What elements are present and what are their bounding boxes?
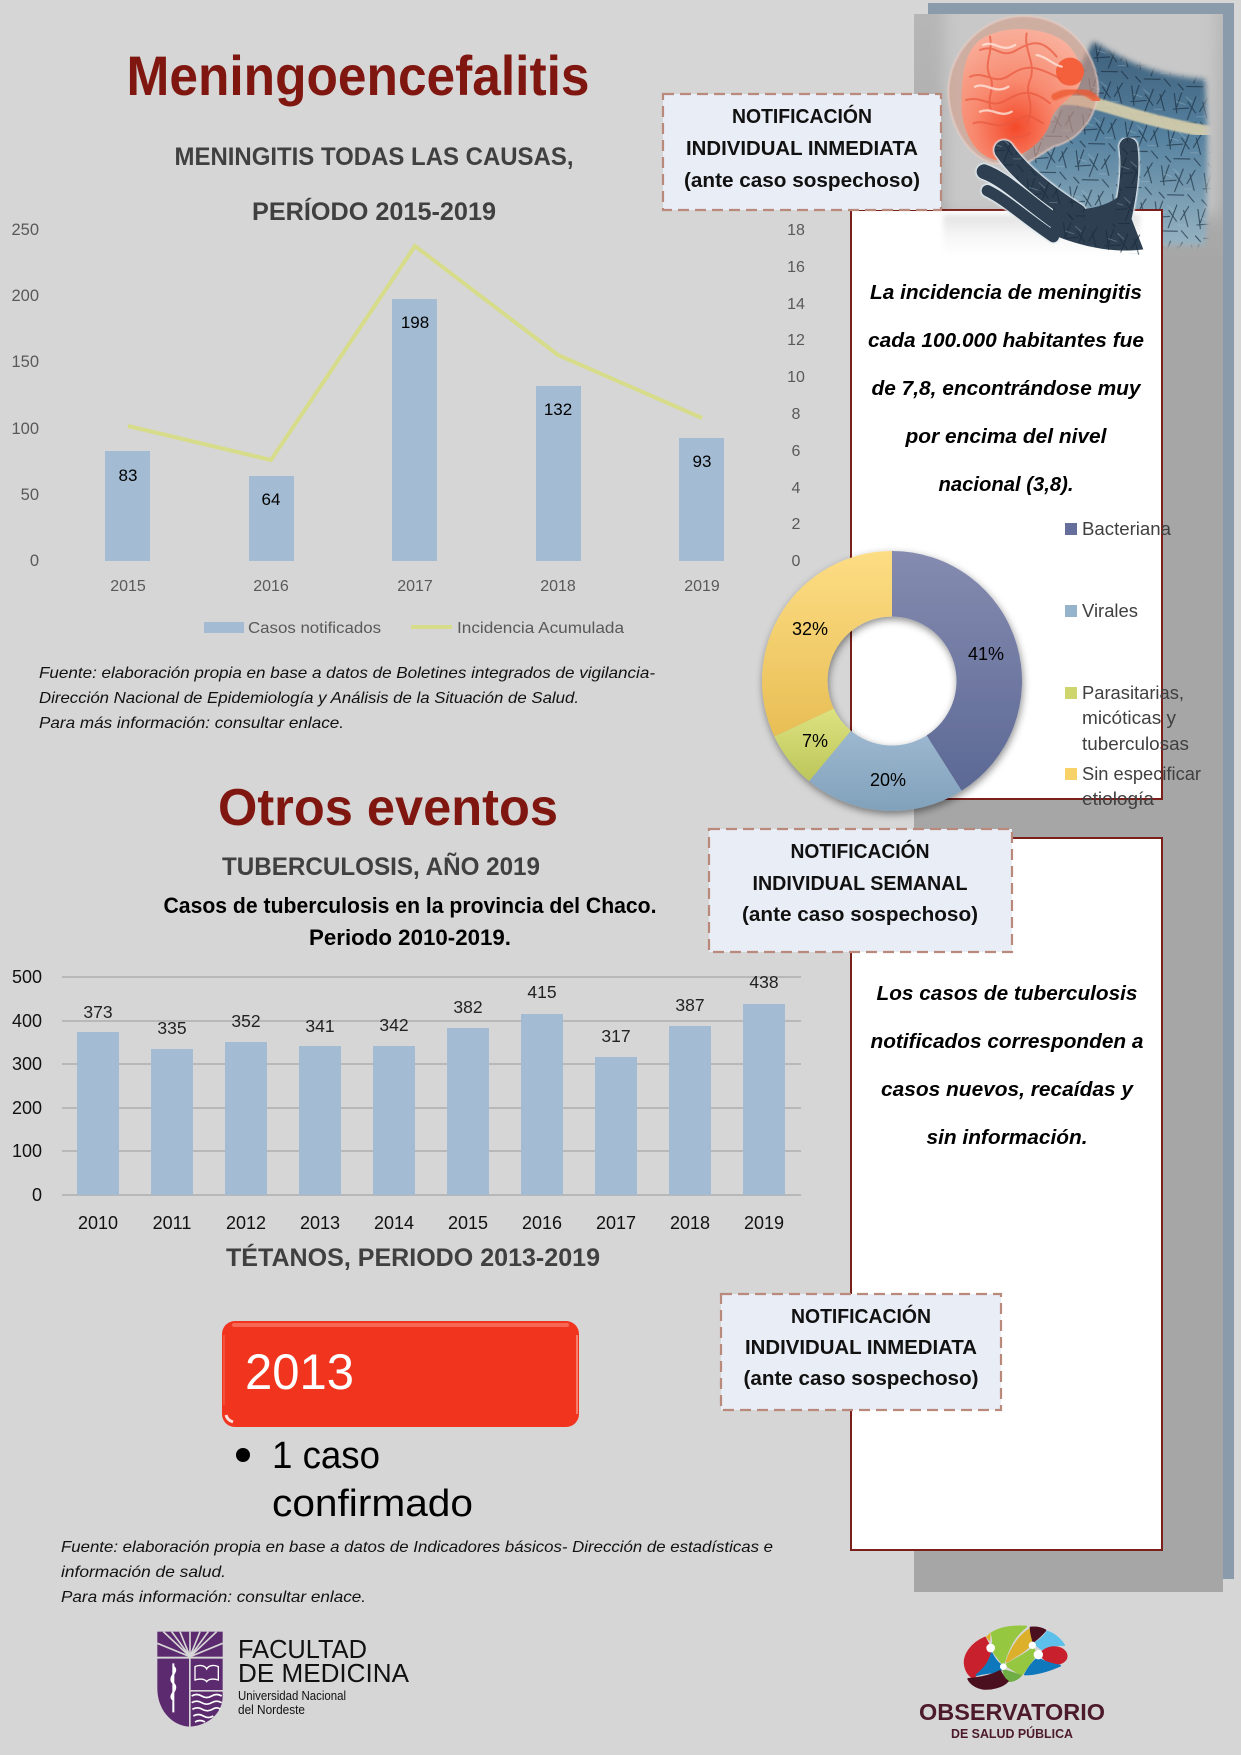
incidence statement: de 7,8, encontrándose muy xyxy=(872,378,1141,400)
incidence statement: nacional (3,8). xyxy=(938,474,1074,496)
bar value labels: 342 xyxy=(379,1015,409,1035)
year labels: 2017 xyxy=(397,578,433,595)
axis labels: 0 xyxy=(32,1185,42,1205)
subtitle: tuberculosis 2019: TUBERCULOSIS, AÑO 2019 xyxy=(222,851,540,881)
callout: immediate notification tetanus xyxy=(721,1294,1001,1410)
observatory name xyxy=(919,1699,1105,1741)
callout: immediate individual notification: NOTIFICACIÓN xyxy=(732,104,872,128)
right axis labels xyxy=(787,222,805,570)
observatory name: OBSERVATORIO xyxy=(919,1699,1105,1725)
chart legend xyxy=(204,620,624,637)
slice: virales xyxy=(809,731,962,811)
tuberculosis statement: notificados corresponden a xyxy=(870,1031,1144,1053)
callout: immediate notification tetanus: NOTIFICACIÓN xyxy=(791,1304,931,1328)
combo chart: meningitis cases and cumulative incidence xyxy=(11,221,805,637)
right axis labels: 0 xyxy=(792,553,801,570)
chart title: tuberculosis cases: Periodo 2010-2019. xyxy=(309,925,511,950)
donut legend: etiología xyxy=(1082,789,1155,809)
donut legend: Sin especificar xyxy=(1082,764,1201,784)
year labels xyxy=(110,578,720,595)
donut legend: Virales xyxy=(1082,601,1138,621)
callout: weekly individual notification: (ante caso sospechoso) xyxy=(742,903,978,926)
callout: immediate individual notification: (ante caso sospechoso) xyxy=(684,169,920,192)
right axis labels: 10 xyxy=(787,369,805,386)
source note: other events: Para más información: consultar enlace. xyxy=(61,1589,366,1606)
donut percentages: 41% xyxy=(968,644,1004,664)
left axis labels: 250 xyxy=(11,221,39,239)
year labels: 2019 xyxy=(744,1213,784,1233)
bar value labels: 373 xyxy=(83,1002,113,1022)
subtitle: meningitis all causes xyxy=(174,143,574,226)
year labels: 2015 xyxy=(448,1213,488,1233)
chart title: tuberculosis cases: Casos de tuberculosis en la provincia del Chaco. xyxy=(164,893,656,918)
callout: immediate individual notification xyxy=(663,94,941,210)
panel: meningitis incidence text box xyxy=(851,210,1162,799)
source note: other events: información de salud. xyxy=(61,1564,226,1581)
bar value labels xyxy=(119,313,711,509)
donut legend: Bacteriana xyxy=(1082,519,1172,539)
year labels: 2017 xyxy=(596,1213,636,1233)
bar value labels: 83 xyxy=(119,466,137,485)
faculty name: FACULTAD xyxy=(238,1634,367,1664)
bar value labels xyxy=(83,972,779,1046)
donut percentages: 32% xyxy=(792,619,828,639)
bar value labels: 387 xyxy=(675,995,705,1015)
tuberculosis statement: Los casos de tuberculosis xyxy=(876,983,1138,1005)
callout: weekly individual notification: INDIVIDUAL SEMANAL xyxy=(752,872,968,895)
bar value labels: 317 xyxy=(601,1026,631,1046)
heading: Otros eventos: Otros eventos xyxy=(218,779,558,837)
callout: weekly individual notification: NOTIFICACIÓN xyxy=(790,839,930,863)
logo: Observatorio de Salud Pública xyxy=(919,1627,1105,1741)
year labels: 2016 xyxy=(253,578,289,595)
year labels: 2016 xyxy=(522,1213,562,1233)
icon: brain and hands illustration xyxy=(943,16,1143,257)
bar value labels: 352 xyxy=(231,1011,261,1031)
slice: bacteriana xyxy=(892,551,1022,791)
left axis labels xyxy=(11,221,39,570)
chart legend: Incidencia Acumulada xyxy=(457,620,624,637)
axis labels: 500 xyxy=(12,967,42,987)
slice: parasitarias xyxy=(774,708,851,781)
slice: sin especificar xyxy=(762,551,892,736)
bar value labels: 64 xyxy=(262,490,280,509)
incidence statement: La incidencia de meningitis xyxy=(870,282,1142,304)
right axis labels: 4 xyxy=(792,480,801,497)
decorative frame: blue-gray back panel xyxy=(928,3,1234,1579)
right axis labels: 14 xyxy=(787,296,805,313)
right axis labels: 2 xyxy=(792,516,801,533)
year labels: 2018 xyxy=(540,578,576,595)
left axis labels: 50 xyxy=(21,486,39,504)
incidence statement: por encima del nivel xyxy=(904,426,1107,448)
bar value labels: 415 xyxy=(527,982,557,1002)
donut legend: Parasitarias, xyxy=(1082,683,1184,703)
bullet: one confirmed case: confirmado xyxy=(272,1483,473,1525)
year labels xyxy=(78,1213,784,1233)
axis labels xyxy=(12,967,42,1205)
year labels: 2012 xyxy=(226,1213,266,1233)
gray side panel xyxy=(914,14,1223,1592)
bar value labels: 438 xyxy=(749,972,779,992)
axis labels: 200 xyxy=(12,1098,42,1118)
faculty name: DE MEDICINA xyxy=(238,1658,410,1688)
image background: light gray feathered square xyxy=(914,14,1223,222)
source note: other events xyxy=(61,1539,773,1606)
line: incidencia acumulada xyxy=(128,246,702,460)
observatory name: DE SALUD PÚBLICA xyxy=(951,1726,1074,1741)
source note: meningitis: Para más información: consultar enlace. xyxy=(39,715,344,732)
right axis labels: 18 xyxy=(787,222,805,239)
callout: immediate notification tetanus: (ante caso sospechoso) xyxy=(744,1367,978,1390)
bar value labels: 132 xyxy=(544,400,572,419)
bar value labels: 335 xyxy=(157,1018,187,1038)
year labels: 2014 xyxy=(374,1213,414,1233)
right axis labels: 12 xyxy=(787,332,805,349)
bar chart: tuberculosis cases 2010-2019 xyxy=(12,967,801,1233)
donut percentages: 7% xyxy=(802,731,828,751)
tuberculosis statement xyxy=(870,983,1144,1149)
donut chart: meningitis etiology xyxy=(762,551,1022,811)
donut percentages: 20% xyxy=(870,770,906,790)
left axis labels: 200 xyxy=(11,287,39,305)
callout: immediate individual notification: INDIVIDUAL INMEDIATA xyxy=(686,137,918,160)
left axis labels: 0 xyxy=(30,552,39,570)
callout: weekly individual notification xyxy=(709,829,1012,952)
incidence statement: cada 100.000 habitantes fue xyxy=(868,330,1144,352)
source note: meningitis: Dirección Nacional de Epidemiología y Análisis de la Situación de Salud. xyxy=(39,690,579,707)
incidence statement xyxy=(868,282,1144,496)
bar value labels: 198 xyxy=(401,313,429,332)
bars xyxy=(77,1004,785,1195)
donut legend: tuberculosas xyxy=(1082,734,1189,754)
brain mark xyxy=(965,1627,1066,1689)
hand xyxy=(984,147,1143,250)
subtitle: meningitis all causes: PERÍODO 2015-2019 xyxy=(252,197,496,226)
faculty name: Universidad Nacional xyxy=(238,1689,346,1703)
left axis labels: 150 xyxy=(11,353,39,371)
spinal cord xyxy=(1053,99,1208,132)
axis labels: 300 xyxy=(12,1054,42,1074)
axis labels: 100 xyxy=(12,1141,42,1161)
right axis labels: 16 xyxy=(787,259,805,276)
right axis labels: 6 xyxy=(792,443,801,460)
donut legend xyxy=(1065,519,1201,809)
year labels: 2010 xyxy=(78,1213,118,1233)
axis labels: 400 xyxy=(12,1011,42,1031)
bars: casos notificados xyxy=(105,299,724,561)
year banner: 2013: 2013 xyxy=(245,1344,354,1400)
faculty name xyxy=(238,1634,410,1717)
chart title: tuberculosis cases xyxy=(164,893,656,950)
year labels: 2018 xyxy=(670,1213,710,1233)
faculty name: del Nordeste xyxy=(238,1703,305,1717)
year labels: 2011 xyxy=(153,1213,191,1233)
subtitle: meningitis all causes: MENINGITIS TODAS LAS CAUSAS, xyxy=(174,143,574,171)
donut percentages xyxy=(792,619,1004,790)
source note: meningitis: Fuente: elaboración propia en base a datos de Boletines integrados de vigilancia- xyxy=(39,665,655,682)
shield emblem xyxy=(157,1632,223,1727)
skull halo xyxy=(948,16,1098,163)
subtitle: tetanus period: TÉTANOS, PERIODO 2013-2019 xyxy=(226,1243,600,1272)
year labels: 2019 xyxy=(684,578,720,595)
white fade under image xyxy=(943,215,1140,257)
donut legend: micóticas y xyxy=(1082,708,1176,728)
source note: meningitis xyxy=(39,665,655,732)
panel: tuberculosis text box xyxy=(851,838,1162,1550)
logo: Facultad de Medicina xyxy=(157,1632,410,1727)
left axis labels: 100 xyxy=(11,420,39,438)
bar value labels: 382 xyxy=(453,997,483,1017)
bar value labels: 93 xyxy=(693,452,711,471)
year labels: 2013 xyxy=(300,1213,340,1233)
main title: Meningoencefalitis: Meningoencefalitis xyxy=(126,44,590,107)
source note: other events: Fuente: elaboración propia en base a datos de Indicadores básicos- Dirección de estadísticas e xyxy=(61,1539,773,1556)
right axis labels: 8 xyxy=(792,406,801,423)
head and neck silhouette xyxy=(1022,39,1212,249)
tuberculosis statement: sin información. xyxy=(926,1127,1088,1149)
bullet: one confirmed case xyxy=(236,1435,473,1525)
tuberculosis statement: casos nuevos, recaídas y xyxy=(881,1079,1134,1101)
brain xyxy=(962,29,1097,160)
year labels: 2015 xyxy=(110,578,146,595)
chart legend: Casos notificados xyxy=(248,620,381,637)
bullet: one confirmed case: 1 caso xyxy=(272,1435,380,1477)
callout: immediate notification tetanus: INDIVIDUAL INMEDIATA xyxy=(745,1336,977,1359)
year banner: 2013 xyxy=(222,1321,579,1427)
bar value labels: 341 xyxy=(305,1016,335,1036)
